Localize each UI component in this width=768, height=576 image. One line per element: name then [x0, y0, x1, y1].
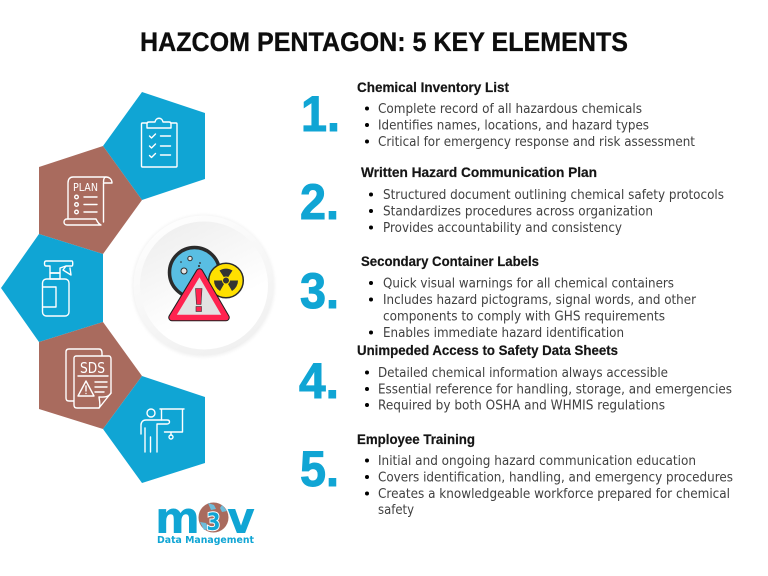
pentagon 5: training — [103, 376, 205, 483]
item 5 — [300, 431, 733, 518]
bullets 1 — [365, 101, 695, 150]
bullets 1: Complete record of all hazardous chemicals — [378, 101, 642, 117]
number 1: 1. — [301, 86, 340, 142]
bullets 1: Identifies names, locations, and hazard types — [378, 118, 649, 134]
pentagon diagram — [1, 92, 205, 483]
bullets 4: Detailed chemical information always accessible — [378, 365, 668, 381]
icon: warning triangle — [172, 272, 226, 318]
title: HAZCOM PENTAGON: 5 KEY ELEMENTS — [140, 27, 628, 57]
icon: checklist clipboard — [142, 118, 177, 167]
icon: presenter with board — [141, 409, 184, 452]
item 4 — [299, 342, 732, 414]
icon: radiation symbol — [209, 263, 243, 298]
pentagon 4: sds — [39, 322, 142, 429]
logo wordmark: 3 — [206, 508, 220, 536]
number 4: 4. — [299, 353, 339, 409]
emblem disc — [132, 215, 274, 357]
logo — [155, 493, 255, 546]
number 5: 5. — [300, 441, 339, 497]
bullets 2: Structured document outlining chemical safety protocols — [383, 187, 724, 203]
item 1 — [301, 79, 695, 150]
heading 4: Unimpeded Access to Safety Data Sheets — [357, 342, 618, 358]
bullets 5: Covers identification, handling, and emergency procedures — [378, 470, 733, 486]
pentagon 2: plan — [39, 146, 142, 254]
bullets 4: Required by both OSHA and WHMIS regulations — [378, 398, 665, 414]
logo tagline: Data Management — [157, 535, 254, 546]
bullets 5: Creates a knowledgeable workforce prepared for chemical — [378, 486, 730, 502]
heading 3: Secondary Container Labels — [361, 253, 539, 269]
sds word: SDS — [80, 359, 105, 377]
bullets 5: safety — [378, 502, 414, 518]
pentagon 3: spray — [1, 234, 103, 342]
bullets 3: Includes hazard pictograms, signal words, and other — [383, 292, 696, 308]
number 2: 2. — [300, 174, 339, 230]
bullets 4 — [365, 365, 732, 414]
bullets 2: Provides accountability and consistency — [383, 220, 622, 236]
bullets 3: Quick visual warnings for all chemical containers — [383, 276, 674, 292]
bullets 2: Standardizes procedures across organization — [383, 204, 653, 220]
heading 5: Employee Training — [357, 431, 475, 447]
heading 2: Written Hazard Communication Plan — [361, 164, 597, 180]
center hazard emblem — [132, 215, 274, 357]
item 3 — [300, 253, 696, 341]
icon: plan scroll — [64, 177, 112, 225]
logo wordmark: m — [155, 493, 200, 544]
bullets 5 — [365, 453, 733, 518]
heading 1: Chemical Inventory List — [357, 79, 509, 95]
bullets 3 — [369, 276, 696, 341]
logo globe — [198, 502, 228, 532]
logo wordmark: v — [227, 493, 255, 544]
icon: spray bottle — [42, 261, 73, 316]
bullets 3: Enables immediate hazard identification — [383, 325, 624, 341]
bullets 5: Initial and ongoing hazard communication education — [378, 453, 696, 469]
bullets 3: components to comply with GHS requirements — [383, 308, 665, 324]
bullets 1: Critical for emergency response and risk assessment — [378, 134, 695, 150]
plan word: PLAN — [73, 182, 98, 194]
pentagon 1: clipboard — [103, 92, 205, 200]
bullets 4: Essential reference for handling, storage, and emergencies — [378, 382, 732, 398]
number 3: 3. — [300, 263, 339, 319]
bullets 2 — [369, 187, 724, 236]
icon: safety data sheet — [66, 349, 111, 408]
icon: culture dish — [170, 248, 220, 298]
item 2 — [300, 164, 724, 236]
logo wordmark — [155, 493, 255, 544]
